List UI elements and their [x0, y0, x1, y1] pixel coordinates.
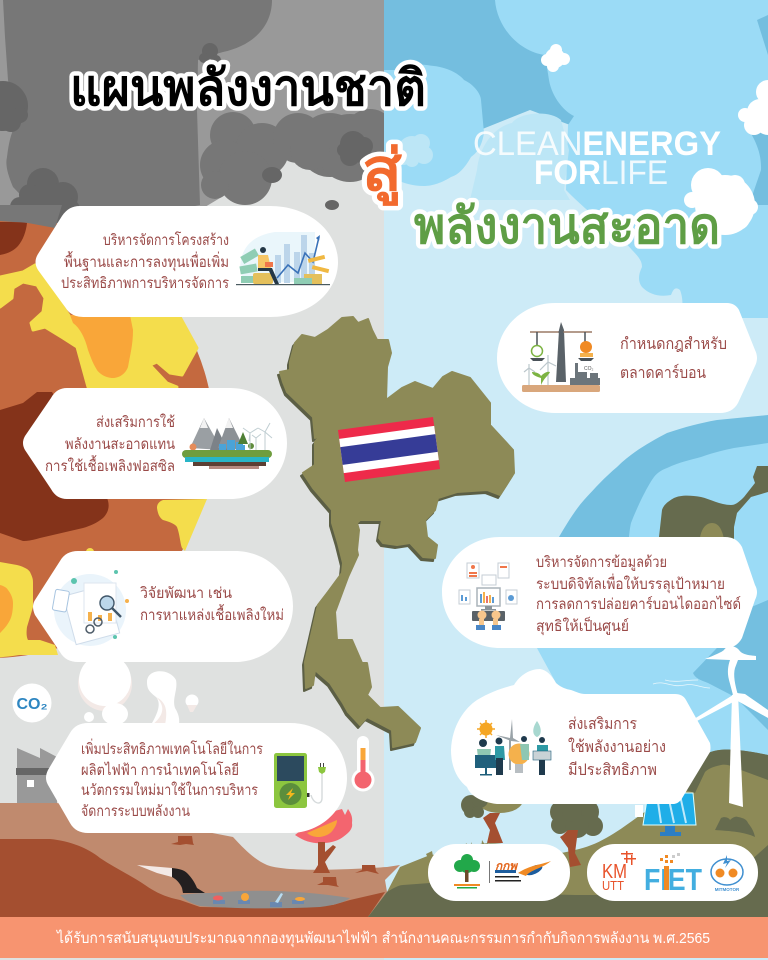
- icon: investor with rising chart: [236, 232, 330, 285]
- footer banner: [0, 917, 768, 958]
- icon: computer with dashboards: [459, 563, 517, 630]
- panel: digital data management: ระบบดิจิทัลเพื่อให้บรรลุเป้าหมาย: [536, 573, 725, 594]
- panel: power generation technology: นวัตกรรมใหม่มาใช้ในการบริหาร: [81, 781, 258, 799]
- panel: digital data management: สุทธิให้เป็นศูนย์: [536, 616, 629, 636]
- panel: carbon market regulation: ตลาดคาร์บอน: [620, 363, 706, 382]
- logo: Mitmotor owl: [711, 855, 743, 892]
- icon: documents and magnifier: [52, 570, 129, 646]
- panel: carbon market regulation: [497, 303, 757, 413]
- panel: clean energy instead of fossil fuel: [23, 388, 287, 499]
- logo pill: energy regulatory commission: [428, 844, 570, 901]
- clean energy for life wordmark: [473, 125, 721, 192]
- bush: [715, 817, 755, 837]
- icon: battery charger: [274, 753, 326, 808]
- Thai flag: [338, 417, 440, 482]
- title: national energy plan: แผนพลังงานชาติ: [70, 60, 426, 116]
- panel: infrastructure and investment: พื้นฐานและการลงทุนเพื่อเพิ่ม: [64, 251, 229, 272]
- panel: digital data management: [442, 537, 757, 648]
- panel: power generation technology: เพิ่มประสิทธิภาพเทคโนโลยีในการ: [81, 738, 263, 758]
- panel: research and development: การหาแหล่งเชื้อเพลิงใหม่: [140, 604, 284, 624]
- map of Thailand: [278, 317, 514, 750]
- logo: ERC: [495, 859, 551, 882]
- logo: KMUTT: KM: [602, 861, 627, 883]
- panel: infrastructure and investment: บริหารจัดการโครงสร้าง: [103, 231, 229, 249]
- panel: infrastructure and investment: ประสิทธิภาพการบริหารจัดการ: [61, 275, 229, 292]
- logo: KMUTT: UTT: [602, 878, 624, 893]
- left ground: [0, 803, 400, 917]
- panel: infrastructure and investment: [36, 206, 338, 317]
- icon: people with renewable energy: [475, 719, 551, 776]
- icon: green tree logo: [454, 854, 480, 888]
- logo pill: KMUTT FIET: [587, 844, 758, 901]
- steam: [78, 654, 198, 730]
- land mass: [659, 466, 768, 560]
- icon: mountain landscape with turbines: [182, 418, 272, 469]
- left background: polluted sky: [0, 0, 396, 960]
- factory: [16, 748, 57, 803]
- CO2 badge: [12, 684, 52, 722]
- wind turbine: [653, 646, 768, 807]
- panel: energy efficiency: [451, 669, 710, 804]
- waste pipe: [137, 865, 205, 893]
- tree stumps: [171, 836, 379, 887]
- panel: carbon market regulation: กำหนดกฎสำหรับ: [620, 336, 727, 353]
- trees: [426, 787, 603, 867]
- panel: power generation technology: จัดการระบบพลังงาน: [81, 803, 190, 820]
- panel: clean energy instead of fossil fuel: การใช้เชื้อเพลิงฟอสซิล: [45, 455, 175, 475]
- logo: ERC: กกพ: [495, 859, 519, 873]
- title: clean energy: พลังงานสะอาด: [414, 198, 720, 254]
- polluted pond: [180, 891, 350, 908]
- right background: clean sky: [384, 0, 768, 960]
- panel: energy efficiency: มีประสิทธิภาพ: [568, 761, 657, 779]
- panel: digital data management: การลดการปล่อยคาร์บอนไดออกไซด์: [536, 595, 741, 613]
- CO2 badge: CO₂: [16, 696, 48, 713]
- panel: power generation technology: ผลิตไฟฟ้า การนำเทคโนโลยี: [81, 761, 239, 779]
- panel: power generation technology: [46, 723, 347, 833]
- panel: energy efficiency: ส่งเสริมการ: [568, 716, 637, 733]
- panel: clean energy instead of fossil fuel: ส่งเสริมการใช้: [96, 413, 175, 431]
- clean energy for life wordmark: CLEANENERGY: [473, 125, 721, 163]
- footer banner: ได้รับการสนับสนุนงบประมาณจากกองทุนพัฒนาไฟฟ้า สำนักงานคณะกรรมการกำกับกิจการพลังงาน พ.ศ.2565: [56, 929, 710, 948]
- panel: energy efficiency: ใช้พลังงานอย่าง: [568, 737, 666, 756]
- logo: Mitmotor owl: MITMOTOR: [715, 887, 740, 892]
- burning tree: [295, 809, 352, 873]
- logo: KMUTT: [602, 851, 636, 893]
- thermometer: [352, 736, 374, 792]
- right hills: [368, 749, 768, 917]
- solar panel: [635, 793, 696, 836]
- panel: clean energy instead of fossil fuel: พลังงานสะอาดแทน: [65, 436, 175, 453]
- panel: research and development: [33, 551, 293, 662]
- icon: carbon balance scale: [522, 322, 600, 392]
- title: to: สู่: [362, 138, 403, 206]
- icon: carbon balance scale: CO₂: [584, 366, 594, 372]
- logo: FIET: FIET: [644, 862, 702, 897]
- clean energy for life wordmark: FORLIFE: [534, 154, 668, 192]
- panel: research and development: วิจัยพัฒนา เช่น: [139, 585, 232, 602]
- left planet: [0, 205, 214, 658]
- right planet: [537, 415, 768, 800]
- panel: digital data management: บริหารจัดการข้อมูลด้วย: [536, 554, 667, 571]
